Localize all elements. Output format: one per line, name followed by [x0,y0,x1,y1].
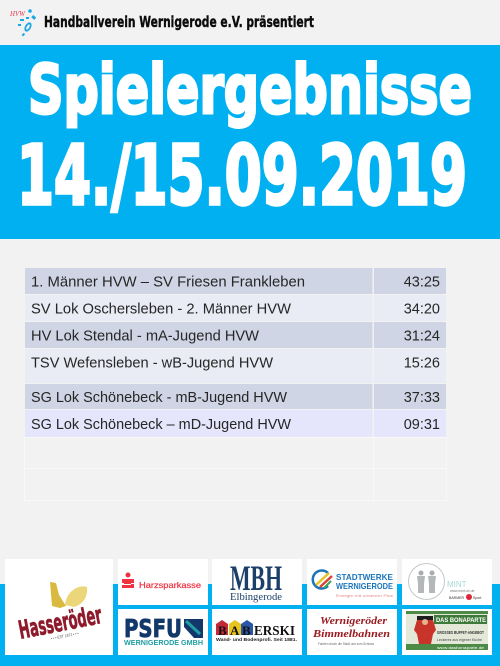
row 2 [25,295,446,321]
sponsor: Baberski [212,609,302,655]
sponsor: Baberski: B [242,623,251,638]
sponsor: Harzsparkasse: Harzsparkasse [139,580,201,590]
row 6 [25,410,446,437]
sponsor: Wernigeröder Bimmelbahnen: Fahrten durch die Stadt und zum Schloss [318,642,374,646]
sponsor: Das Bonaparte [402,609,492,655]
presenter line: Handballverein Wernigerode e.V. präsentiert [44,13,314,31]
row 5: 37:33 [404,390,440,406]
row 2: 34:20 [404,302,440,318]
sponsor: Stadtwerke: STADTWERKE [336,572,393,582]
row 2: SV Lok Oschersleben - 2. Männer HVW [31,302,291,318]
sponsor: Das Bonaparte: DAS BONAPARTE [436,618,486,624]
icon: club logo [9,9,36,36]
sponsor: MBH [212,558,302,605]
sponsor: PSFU: WERNIGERODE GMBH [124,640,203,647]
row 3: HV Lok Stendal - mA-Jugend HVW [31,328,259,344]
row 6: 09:31 [404,417,440,433]
results table [24,268,446,500]
sponsor: Stadtwerke [307,559,397,605]
empty rows [24,438,446,500]
sponsor: MBH: Elbingerode [230,592,282,603]
row 3: 31:24 [404,328,440,344]
sponsor: Das Bonaparte: www.dasbonaparte.de [437,646,484,650]
row 4: 15:26 [404,356,440,372]
sponsor: Stadtwerke: WERNIGERODE [336,581,393,591]
sponsor: PSFU: PSFU [124,614,182,643]
sponsor: Stadtwerke: Energie mit unserem Plus [336,593,393,598]
row 4 [25,349,446,383]
title band [0,45,500,239]
sponsor: Baberski: B [218,623,227,638]
row 3 [25,322,446,348]
row 6: SG Lok Schönebeck – mD-Jugend HVW [31,417,291,433]
sponsor: Baberski: A [230,623,240,638]
sponsor: Mint: MINT [447,580,467,589]
sponsor: PSFU [118,609,208,655]
sponsor: Baberski: Wand- und Bodenprofi. Seit 1881. [216,637,297,642]
sponsor: Hasseröder [5,559,113,655]
sponsor: Wernigeröder Bimmelbahnen: Wernigeröder [320,615,388,627]
row 5: SG Lok Schönebeck - mB-Jugend HVW [31,390,287,406]
sponsor: Hasseröder: • • • EST 1872 • • • [51,631,79,641]
sponsor: Das Bonaparte: Leckeres aus eigener Küche [437,637,483,642]
sponsor band [0,558,500,666]
sponsor: Mint [402,559,492,605]
sponsor: MBH: MBH [230,558,282,598]
icon: club logo: HVW [9,10,26,18]
row 1: 43:25 [404,274,440,290]
sponsor: Wernigeröder Bimmelbahnen [307,609,397,655]
sponsor: Mint: Sport [473,596,481,600]
row 1: 1. Männer HVW – SV Friesen Frankleben [31,274,305,290]
sponsor: Mint: BARMER [449,596,464,600]
row 5 [25,384,446,409]
sponsor: Harzsparkasse [118,559,208,605]
row 4: TSV Wefensleben - wB-Jugend HVW [31,356,273,372]
top line: club logo and presenter [9,9,314,36]
row 1 [25,268,446,294]
sponsor: Wernigeröder Bimmelbahnen: Bimmelbahnen [312,628,390,640]
sponsor: Hasseröder: Hasseröder [16,600,104,645]
sponsor: Mint: www.mint-wr.de [450,589,475,593]
sponsor: Baberski: ERSKI [254,624,295,639]
